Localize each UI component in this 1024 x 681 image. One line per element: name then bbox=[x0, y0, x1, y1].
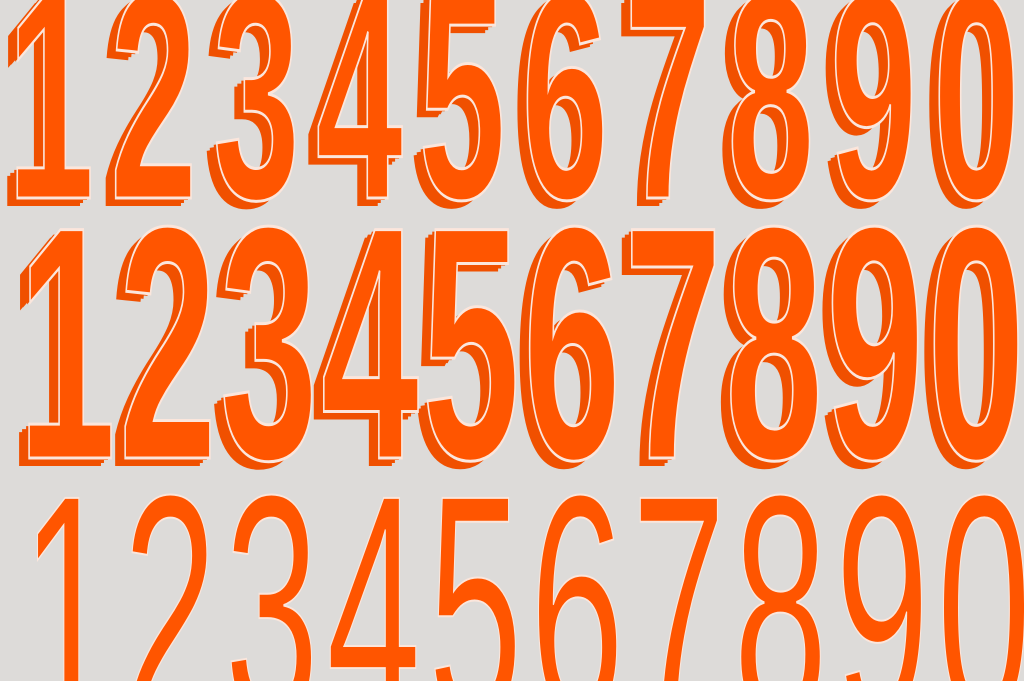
row 2: bold extruded digits: 1234567890 bbox=[8, 166, 1018, 537]
row 2: bold extruded digits: 1234567890 bbox=[15, 160, 1024, 531]
row 2: bold extruded digits: 1234567890 bbox=[11, 163, 1021, 534]
row 2: bold extruded digits bbox=[19, 224, 1019, 470]
row 2: bold extruded digits: 1234567890 bbox=[18, 158, 1024, 529]
